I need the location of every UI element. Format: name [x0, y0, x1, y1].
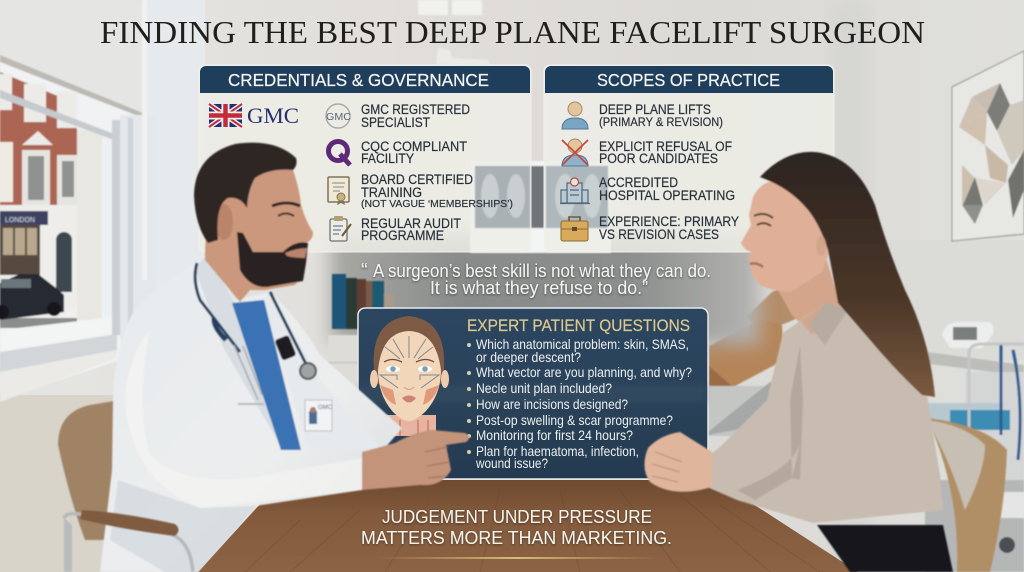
ID badge: GMC: [318, 405, 333, 411]
doctor eye and brow: [272, 203, 300, 206]
question list: Necle unit plan included?: [476, 381, 612, 396]
patient blouse: [707, 303, 943, 523]
bookshelf: [328, 274, 394, 395]
question list: How are incisions designed?: [476, 397, 628, 412]
text: board certified training: TRAINING: [361, 185, 422, 200]
text: experience: [599, 214, 739, 242]
panel header: credentials: [200, 66, 530, 93]
icon: briefcase: [561, 217, 588, 241]
text: explicit refusal: [599, 139, 732, 166]
question list: Post-op swelling & scar programme?: [476, 413, 673, 428]
closing statement: [361, 506, 672, 548]
text: accredited hospital: [599, 175, 735, 203]
doctor scrubs: [232, 300, 301, 450]
stethoscope: [195, 263, 316, 404]
text: GMC registered specialist: [361, 102, 470, 130]
pull quote: [361, 260, 711, 298]
question list: Plan for haematoma, infection,: [476, 444, 639, 459]
chair: patient: [927, 418, 1007, 572]
text: deep plane lifts: DEEP PLANE LIFTS: [599, 102, 711, 117]
text: experience: EXPERIENCE: PRIMARY: [599, 214, 739, 229]
x-ray seen through panel: [475, 166, 530, 228]
panel: credentials and governance: [199, 65, 531, 252]
doctor coat: [100, 254, 402, 572]
wall art: [952, 51, 1024, 241]
GMC wordmark: GMC: [247, 103, 299, 128]
panel header: scopes: SCOPES OF PRACTICE: [597, 70, 780, 90]
x-ray seen through scopes panel: [546, 166, 608, 228]
window with street view: [0, 0, 156, 402]
text: CQC compliant facility: CQC COMPLIANT: [361, 139, 467, 154]
doctor: [100, 143, 469, 572]
text: regular audit programme: [361, 216, 461, 243]
patient hands clasped: [644, 432, 712, 492]
patient eye and lips: [754, 214, 773, 226]
text: board certified training: [361, 172, 513, 210]
text: deep plane lifts: [599, 102, 723, 129]
pull quote: A surgeon’s best skill is not what they can do.: [373, 261, 711, 281]
x-ray lightbox: [470, 161, 611, 253]
illustration: face with lift vectors: [370, 316, 449, 436]
lapel microphone: [274, 335, 297, 361]
question list: [467, 337, 692, 471]
panel header: credentials: CREDENTIALS & GOVERNANCE: [228, 70, 489, 90]
text: CQC compliant facility: FACILITY: [361, 151, 414, 166]
window with street view: LONDON: [5, 217, 35, 224]
pull quote: “: [361, 260, 368, 282]
title: FINDING THE BEST DEEP PLANE FACELIFT SURGEON: [100, 14, 925, 50]
doctor hand pointing: [362, 430, 469, 490]
question list: Which anatomical problem: skin, SMAS,: [476, 337, 689, 352]
panel header: scopes: [545, 66, 833, 93]
lift vector arrows: [380, 336, 439, 388]
icon: CQC Q: [328, 142, 350, 165]
patient neck: [775, 245, 842, 335]
blouse shading: [737, 345, 803, 500]
text: CQC compliant facility: [361, 139, 467, 166]
text: GMC registered specialist: GMC REGISTERED: [361, 102, 470, 117]
text: GMC registered specialist: SPECIALIST: [361, 115, 430, 130]
text: explicit refusal: POOR CANDIDATES: [599, 151, 718, 166]
icon: GMC seal: [326, 104, 351, 128]
icon: certificate: [328, 177, 349, 205]
closing statement: MATTERS MORE THAN MARKETING.: [361, 527, 672, 548]
dark backdrop behind quote: [330, 235, 760, 345]
patient ear: [816, 236, 826, 256]
icon: GMC seal: GMC: [326, 112, 351, 123]
panel: scopes of practice: [544, 65, 834, 252]
patient: [644, 152, 953, 572]
patient skirt: [817, 525, 953, 572]
chair back: doctor: [58, 400, 120, 540]
text: accredited hospital: ACCREDITED: [599, 175, 678, 190]
doctor head: [205, 160, 313, 302]
text: deep plane lifts: (PRIMARY & REVISION): [599, 117, 723, 129]
patient face: [741, 181, 830, 292]
text: accredited hospital: HOSPITAL OPERATING: [599, 188, 735, 203]
icon: clipboard: [330, 216, 351, 241]
icon: union flag: [209, 104, 242, 127]
right room equipment: couch, trolley, monitor: [708, 289, 1024, 572]
doctor beard: [237, 232, 308, 287]
question list: wound issue?: [475, 456, 548, 471]
text: board certified training: (NOT VAGUE ‘MEMBERSHIPS’): [361, 198, 513, 210]
doctor ear: [215, 204, 233, 240]
icon: refused candidate: [562, 139, 588, 166]
doctor hair: [194, 143, 297, 243]
icon: patient: [562, 102, 588, 129]
text: board certified training: BOARD CERTIFIED: [361, 172, 473, 187]
ID badge: [305, 400, 333, 431]
question list: Monitoring for first 24 hours?: [476, 428, 633, 443]
text: regular audit programme: PROGRAMME: [361, 228, 444, 243]
patient hair: [760, 152, 935, 397]
closing statement: JUDGEMENT UNDER PRESSURE: [382, 506, 652, 527]
heading: expert patient questions: EXPERT PATIENT QUESTIONS: [467, 316, 690, 335]
question list: or deeper descent?: [476, 350, 581, 365]
panel: expert patient questions: [358, 308, 708, 479]
text: regular audit programme: REGULAR AUDIT: [361, 216, 461, 231]
text: explicit refusal: EXPLICIT REFUSAL OF: [599, 139, 732, 154]
question list: What vector are you planning, and why?: [476, 365, 692, 380]
gold underline: [375, 557, 660, 559]
text: experience: VS REVISION CASES: [599, 227, 719, 242]
coat shading and folds: [110, 480, 255, 572]
armrest: doctor chair: [64, 510, 193, 572]
table: [198, 480, 858, 572]
pull quote: It is what they refuse to do.”: [430, 278, 648, 298]
icon: hospital: [560, 178, 590, 204]
